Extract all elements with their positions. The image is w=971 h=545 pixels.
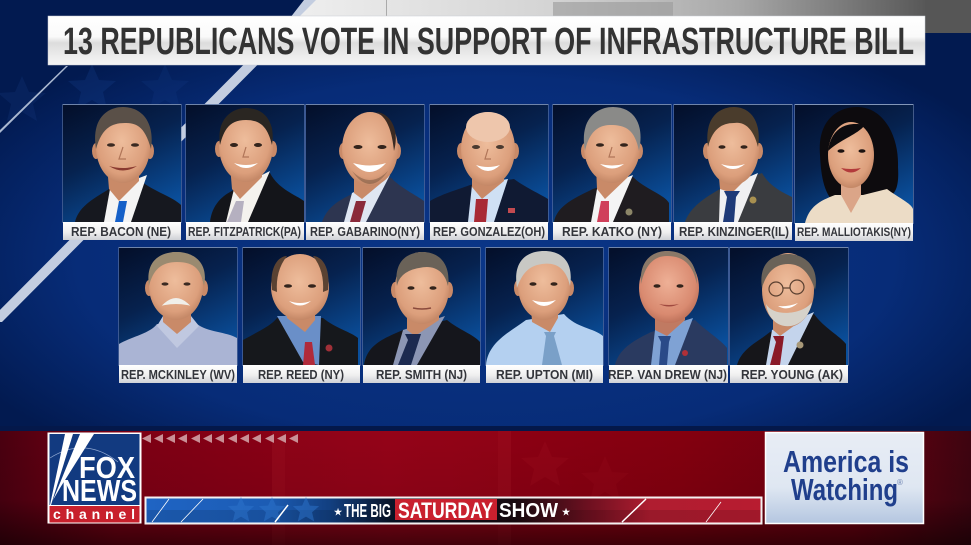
card: Rep. Kinzinger — [674, 104, 792, 240]
label: Rep. Gonzalez: REP. GONZALEZ(OH) — [433, 224, 545, 239]
icon: searchlight beams — [50, 434, 118, 505]
portrait row 2 — [119, 248, 848, 383]
panel: America is Watching — [766, 432, 924, 524]
card: Rep. Upton — [486, 248, 603, 383]
logo: Fox News Channel — [48, 432, 142, 524]
card: Rep. Malliotakis — [795, 104, 913, 241]
panel: America is Watching: America is — [783, 444, 909, 479]
card: Rep. Fitzpatrick — [186, 104, 304, 240]
label: Rep. Bacon: REP. BACON (NE) — [71, 224, 171, 239]
background: blue studio wall — [0, 0, 971, 432]
label: Rep. Upton: REP. UPTON (MI) — [496, 367, 593, 382]
card: Rep. Bacon — [63, 104, 181, 240]
card: Rep. McKinley — [119, 248, 237, 383]
label: Rep. Smith: REP. SMITH (NJ) — [376, 367, 467, 382]
label: Rep. Fitzpatrick: REP. FITZPATRICK(PA) — [188, 224, 301, 239]
show title — [334, 498, 571, 523]
label: Rep. McKinley: REP. MCKINLEY (WV) — [121, 367, 235, 382]
top grey photo strip — [300, 0, 971, 33]
label: Rep. Reed: REP. REED (NY) — [258, 367, 344, 382]
show title: THE BIG — [344, 501, 391, 521]
show name strip — [146, 497, 762, 524]
panel: America is Watching: ® — [897, 478, 903, 487]
portrait row 1 — [63, 104, 913, 241]
card: Rep. Smith — [363, 248, 480, 383]
lower red news band — [0, 426, 971, 545]
show title: SHOW — [499, 500, 558, 522]
card: Rep. Van Drew — [608, 248, 728, 383]
logo: Fox News Channel: channel — [53, 506, 135, 522]
logo: Fox News Channel: FOX — [79, 450, 135, 485]
show title: ★ — [334, 507, 343, 517]
decorative stripe stars — [228, 497, 319, 522]
card: Rep. Young — [730, 248, 848, 383]
card: Rep. Gabarino — [306, 104, 424, 240]
label: Rep. Malliotakis: REP. MALLIOTAKIS(NY) — [797, 225, 911, 239]
card: Rep. Katko — [553, 104, 671, 240]
card: Rep. Reed — [243, 248, 360, 383]
ticker arrows — [142, 434, 298, 443]
card: Rep. Gonzalez — [430, 104, 548, 240]
logo: Fox News Channel: NEWS — [62, 473, 137, 508]
label: Rep. Gabarino: REP. GABARINO(NY) — [310, 224, 420, 239]
label: Rep. Young: REP. YOUNG (AK) — [741, 367, 843, 382]
label: Rep. Van Drew: REP. VAN DREW (NJ) — [608, 367, 727, 382]
show title: SATURDAY — [398, 498, 493, 523]
show title: ★ — [562, 507, 571, 517]
panel: America is Watching: Watching — [791, 472, 898, 507]
label: Rep. Kinzinger: REP. KINZINGER(IL) — [679, 224, 789, 239]
label: Rep. Katko: REP. KATKO (NY) — [562, 224, 662, 239]
